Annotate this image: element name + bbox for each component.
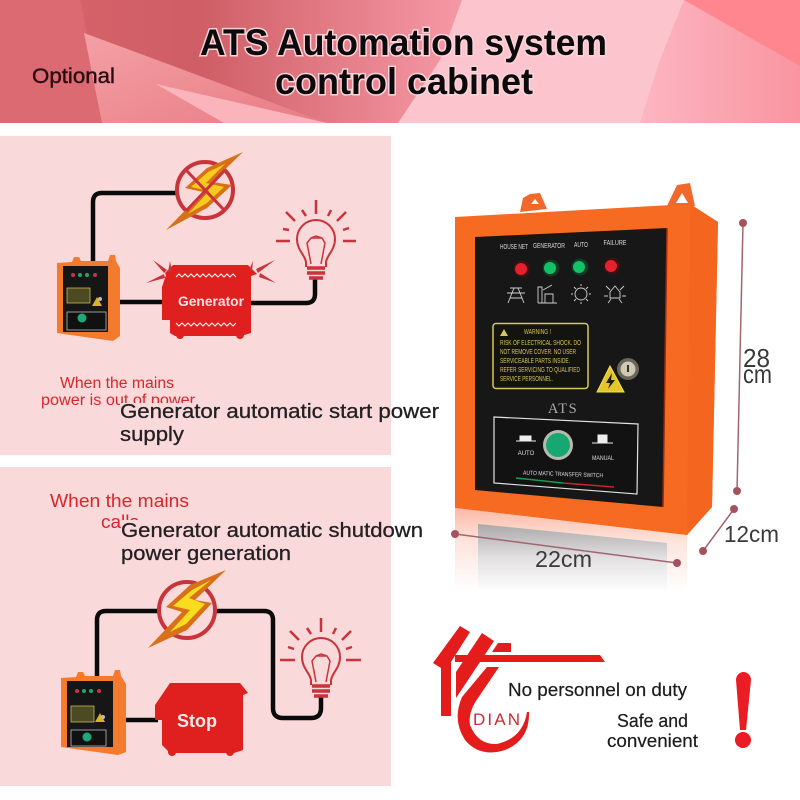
text: safe and convenient	[607, 710, 698, 751]
logo: DIAN: DIAN	[473, 710, 520, 729]
switch box: AUTO	[518, 451, 535, 457]
icon: light bulb	[280, 618, 361, 696]
dimension: depth 12cm	[699, 505, 779, 555]
icon: exclamation mark	[735, 672, 751, 748]
caption: when mains out: power is out of power	[41, 392, 195, 409]
caption: when mains calls: When the mains	[50, 490, 189, 511]
title	[200, 22, 607, 102]
logo: DIAN	[433, 626, 605, 752]
text: no personnel on duty: No personnel on duty	[508, 679, 688, 700]
mounting tabs	[520, 183, 695, 212]
icon: generator stopped: Stop	[177, 711, 217, 731]
warning label: WARNING !	[524, 327, 551, 336]
indicator labels: HOUSE NET	[500, 244, 528, 251]
wire: cabinet to generator to bulb	[118, 278, 315, 303]
switch box: AUTO MATIC TRANSFER SWITCH	[523, 471, 603, 479]
dimension: depth 12cm: 12cm	[724, 521, 779, 547]
icon: generator running	[146, 260, 276, 339]
warning label	[493, 324, 588, 388]
dimension: width 22cm: 22cm	[535, 546, 592, 572]
caption: when mains calls: calls	[101, 511, 139, 532]
indicator labels: AUTO	[574, 242, 588, 249]
control panel	[475, 228, 667, 507]
wire: mains to cabinet	[93, 193, 178, 262]
indicator labels	[500, 240, 627, 251]
icon: live lightning	[148, 570, 226, 648]
text: safe and convenient: convenient	[607, 730, 698, 751]
icon: mini cabinet	[61, 670, 126, 755]
warning label: NOT REMOVE COVER. NO USER	[500, 347, 576, 356]
icon: crossed-out lightning	[166, 152, 243, 230]
header banner	[0, 0, 800, 123]
switch box	[494, 417, 638, 494]
text: safe and convenient: Safe and	[617, 710, 688, 731]
icon: light bulb	[276, 200, 356, 278]
indicator labels: GENERATOR	[533, 243, 565, 250]
panel: mains restored	[0, 467, 423, 786]
warning label: SERVICE PERSONNEL.	[500, 374, 553, 383]
key lock	[617, 358, 639, 380]
text: generator automatic shutdown: Generator automatic shutdown	[121, 519, 423, 542]
optional label: Optional	[32, 65, 115, 88]
text: generator automatic shutdown	[121, 519, 423, 565]
text: generator automatic start: supply	[120, 423, 185, 446]
icon: generator running: Generator	[178, 293, 245, 309]
cabinet reflection	[455, 508, 687, 592]
indicator labels: FAILURE	[604, 240, 627, 247]
text: generator automatic start: Generator automatic start power	[120, 400, 439, 423]
warning label: REFER SERVICING TO QUALIFIED	[500, 365, 580, 374]
product: ATS cabinet	[455, 183, 718, 592]
dimension: width 22cm	[451, 530, 681, 572]
title: control cabinet	[275, 61, 533, 102]
icon: mini cabinet	[57, 255, 120, 341]
cabinet body	[455, 204, 718, 535]
warning label: RISK OF ELECTRICAL SHOCK. DO	[500, 338, 581, 347]
switch box: MANUAL	[592, 456, 615, 462]
caption: when mains out: When the mains	[60, 375, 174, 392]
wire: mains loop	[97, 611, 321, 720]
panel: mains power out	[0, 136, 439, 455]
ATS plate text: ATS	[548, 401, 578, 417]
warning triangle	[597, 366, 624, 392]
dimension: height 28cm: 28	[743, 343, 770, 373]
icon: generator stopped	[155, 683, 248, 756]
text: generator automatic shutdown: power generation	[121, 542, 291, 565]
dimension: height 28cm	[733, 219, 772, 495]
title: ATS Automation system	[200, 22, 607, 63]
warning label: SERVICEABLE PARTS INSIDE.	[500, 356, 570, 365]
indicator lights	[514, 258, 620, 278]
dimension: height 28cm: cm	[743, 359, 772, 389]
caption: when mains calls	[50, 490, 189, 532]
text: generator automatic start	[120, 400, 439, 446]
caption: when mains out	[41, 375, 195, 409]
indicator icons	[507, 284, 626, 304]
